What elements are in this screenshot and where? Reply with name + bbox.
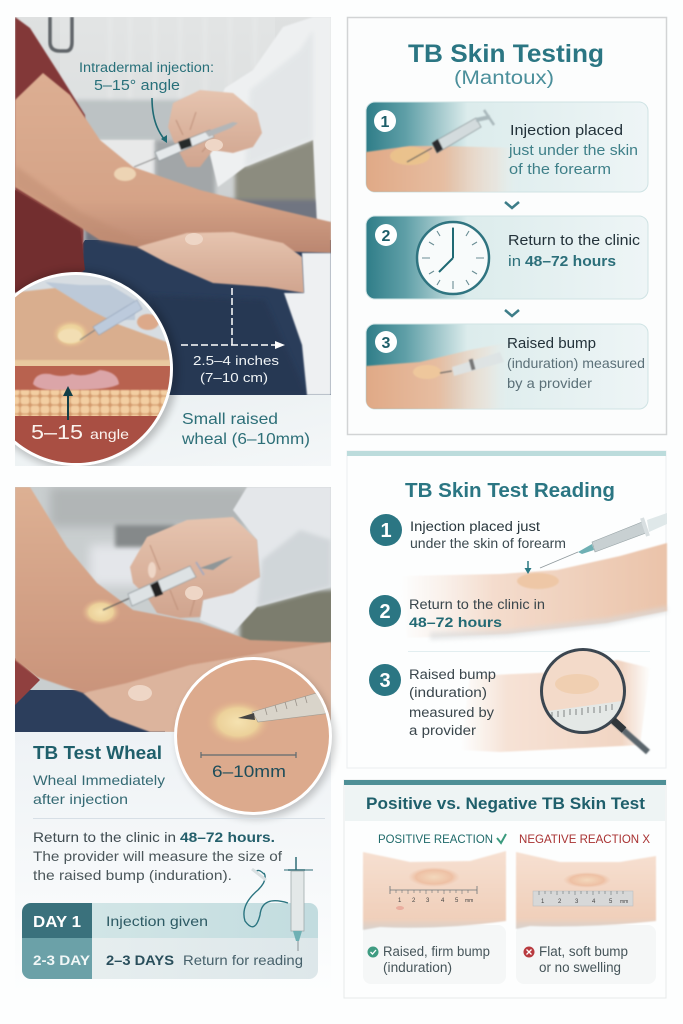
step 1: 1 bbox=[380, 520, 392, 542]
arm photo with ruler: mm bbox=[620, 899, 628, 905]
step 2 text prefix: in bbox=[508, 254, 521, 270]
arm photo with ruler: 2 bbox=[558, 899, 562, 905]
syringe in hand bbox=[134, 122, 238, 167]
coat bbox=[200, 487, 331, 633]
step 2 hours: 48–72 hours bbox=[409, 614, 502, 630]
step number 2: 2 bbox=[382, 228, 391, 245]
icon: syringe with tube bbox=[244, 857, 313, 951]
step card 1 bbox=[366, 102, 648, 192]
skin with wheal bbox=[366, 146, 520, 192]
step 2 text line one: Return to the clinic bbox=[508, 233, 640, 249]
step 2 line one: Return to the clinic in bbox=[409, 597, 545, 612]
instruction line three: the raised bump (induration). bbox=[33, 867, 232, 883]
arm bbox=[15, 487, 331, 697]
step 1 text line three: of the forearm bbox=[509, 162, 611, 178]
return for reading: Return for reading bbox=[183, 952, 303, 968]
step 3 text line three: by a provider bbox=[507, 375, 592, 391]
arm photo with ruler: 3 bbox=[426, 898, 430, 904]
caption line one: Small raised bbox=[182, 411, 278, 428]
subheading line two: after injection bbox=[33, 791, 128, 807]
syringe bbox=[103, 556, 233, 610]
step number 3 bbox=[375, 331, 397, 353]
skin with bump bbox=[366, 346, 493, 409]
step 3 text heading: Raised bump bbox=[507, 336, 596, 352]
arm photo with ruler bbox=[363, 851, 506, 930]
arm photo with ruler: 2 bbox=[412, 898, 416, 904]
inset label number: 5–15 bbox=[31, 422, 83, 444]
arm photo with ruler: 5 bbox=[609, 899, 613, 905]
negative text one: Flat, soft bump bbox=[539, 944, 628, 959]
timeline table bbox=[22, 903, 318, 979]
caption background bbox=[15, 395, 331, 466]
step 2 text hours: 48–72 hours bbox=[525, 254, 616, 270]
negative column bbox=[516, 832, 656, 984]
arm photo with ruler: 5 bbox=[455, 898, 459, 904]
step card 3 bbox=[366, 324, 648, 409]
magnifier bbox=[547, 651, 622, 731]
patient arm bbox=[15, 73, 331, 253]
magnified wheal inset bbox=[170, 650, 340, 820]
arm photo with ruler: 4 bbox=[441, 898, 445, 904]
step 1 text line two: just under the skin bbox=[508, 143, 638, 159]
close-up photo bbox=[15, 487, 335, 735]
title: TB Skin Testing bbox=[408, 40, 604, 68]
arm photo with ruler bbox=[516, 852, 656, 929]
text panel background bbox=[15, 732, 331, 994]
step 2: 2 bbox=[379, 601, 391, 623]
return instruction hours: 48–72 hours. bbox=[180, 829, 275, 845]
wheal bbox=[84, 600, 118, 624]
injection given: Injection given bbox=[106, 913, 208, 929]
jeans bbox=[60, 240, 331, 395]
step 1 line two: under the skin of forearm bbox=[410, 536, 566, 551]
subheading line one: Wheal Immediately bbox=[33, 772, 165, 788]
negative text two: or no swelling bbox=[539, 960, 621, 975]
2-3 day label: 2-3 DAY bbox=[33, 952, 91, 968]
text card bbox=[516, 925, 656, 984]
doctor coat upper bbox=[205, 17, 331, 225]
panel: TB Skin Test Reading bbox=[347, 451, 667, 768]
doctor upper hand bbox=[168, 90, 262, 167]
step 3: 3 bbox=[379, 670, 391, 692]
arm photo with ruler: 3 bbox=[575, 899, 579, 905]
arrow: angle pointer bbox=[152, 98, 167, 143]
label: angle: 5–15° angle bbox=[94, 77, 180, 94]
lower coat sleeve bbox=[284, 253, 331, 395]
arrow: chevron 1 bbox=[505, 202, 519, 208]
icon: check bbox=[497, 834, 506, 843]
panel: Positive vs. Negative TB Skin Test bbox=[344, 780, 666, 998]
icon: clock bbox=[417, 222, 489, 294]
step card 2 bbox=[366, 216, 648, 299]
title: TB Skin Test Reading bbox=[405, 480, 615, 502]
step 1 text heading: Injection placed bbox=[510, 123, 623, 139]
step 2 bbox=[369, 595, 545, 630]
icon: green check circle bbox=[368, 946, 378, 958]
inset: skin cross-section bbox=[15, 268, 178, 466]
step number 1: 1 bbox=[381, 114, 390, 131]
step 1 bbox=[370, 514, 566, 551]
size label: 6–10mm bbox=[212, 762, 286, 781]
doctor hand bbox=[130, 517, 260, 618]
step 3 line three: measured by bbox=[409, 705, 494, 720]
icon: syringe bbox=[440, 352, 504, 376]
forearm illustration bbox=[400, 513, 667, 640]
day 1 label: DAY 1 bbox=[33, 914, 81, 931]
step number 1 bbox=[374, 110, 396, 132]
measure line bbox=[201, 752, 296, 758]
panel: TB test wheal bbox=[15, 487, 340, 994]
arrow head bbox=[275, 341, 285, 349]
wheal on arm bbox=[114, 167, 136, 181]
positive text one: Raised, firm bump bbox=[383, 944, 490, 959]
return instruction start: Return to the clinic in bbox=[33, 829, 176, 845]
clinical photo bbox=[15, 17, 331, 395]
step 3 bbox=[369, 664, 496, 738]
arm photo with ruler: 4 bbox=[592, 899, 596, 905]
positive column bbox=[363, 832, 506, 984]
arm photo with ruler: mm bbox=[465, 898, 473, 904]
arm photo with ruler: 1 bbox=[398, 898, 402, 904]
icon: syringe bbox=[407, 110, 494, 162]
caption line two: wheal (6–10mm) bbox=[181, 431, 310, 448]
2-3 days: 2–3 DAYS bbox=[106, 952, 174, 968]
step 1 line one: Injection placed just bbox=[410, 519, 540, 534]
step 3 line two: (induration) bbox=[409, 685, 487, 700]
inset label word: angle bbox=[90, 426, 129, 442]
label: distance inches: 2.5–4 inches bbox=[193, 353, 280, 368]
panel: intradermal injection photo bbox=[0, 17, 331, 471]
positive label: POSITIVE REACTION bbox=[378, 832, 493, 846]
positive text two: (induration) bbox=[383, 960, 452, 975]
distance measure arrow bbox=[181, 288, 278, 345]
step number 2 bbox=[375, 224, 397, 246]
arm photo with ruler: 1 bbox=[541, 899, 545, 905]
forearm with magnifier bbox=[460, 650, 650, 752]
doctor lower hand bbox=[137, 232, 304, 293]
step 3 line four: a provider bbox=[409, 723, 477, 738]
instruction line two: The provider will measure the size of bbox=[33, 848, 282, 864]
label: distance cm: (7–10 cm) bbox=[200, 370, 268, 385]
inset syringe bbox=[80, 300, 142, 340]
step 3 text line two: (induration) measured bbox=[507, 355, 645, 371]
label: intradermal injection: Intradermal injection: bbox=[79, 60, 214, 75]
lower supporting hand bbox=[83, 642, 331, 732]
text card bbox=[363, 925, 506, 984]
step number 3: 3 bbox=[382, 335, 391, 352]
shirt bbox=[15, 17, 85, 293]
arrow: chevron 2 bbox=[505, 310, 519, 316]
subtitle: (Mantoux) bbox=[454, 68, 554, 89]
negative label: NEGATIVE REACTION X bbox=[519, 832, 650, 846]
step 3 line one: Raised bump bbox=[409, 667, 496, 682]
heading: TB Test Wheal bbox=[33, 743, 162, 763]
heading: Positive vs. Negative TB Skin Test bbox=[366, 795, 646, 813]
icon: red x circle bbox=[524, 946, 534, 958]
panel: TB Skin Testing (Mantoux) bbox=[348, 18, 666, 434]
